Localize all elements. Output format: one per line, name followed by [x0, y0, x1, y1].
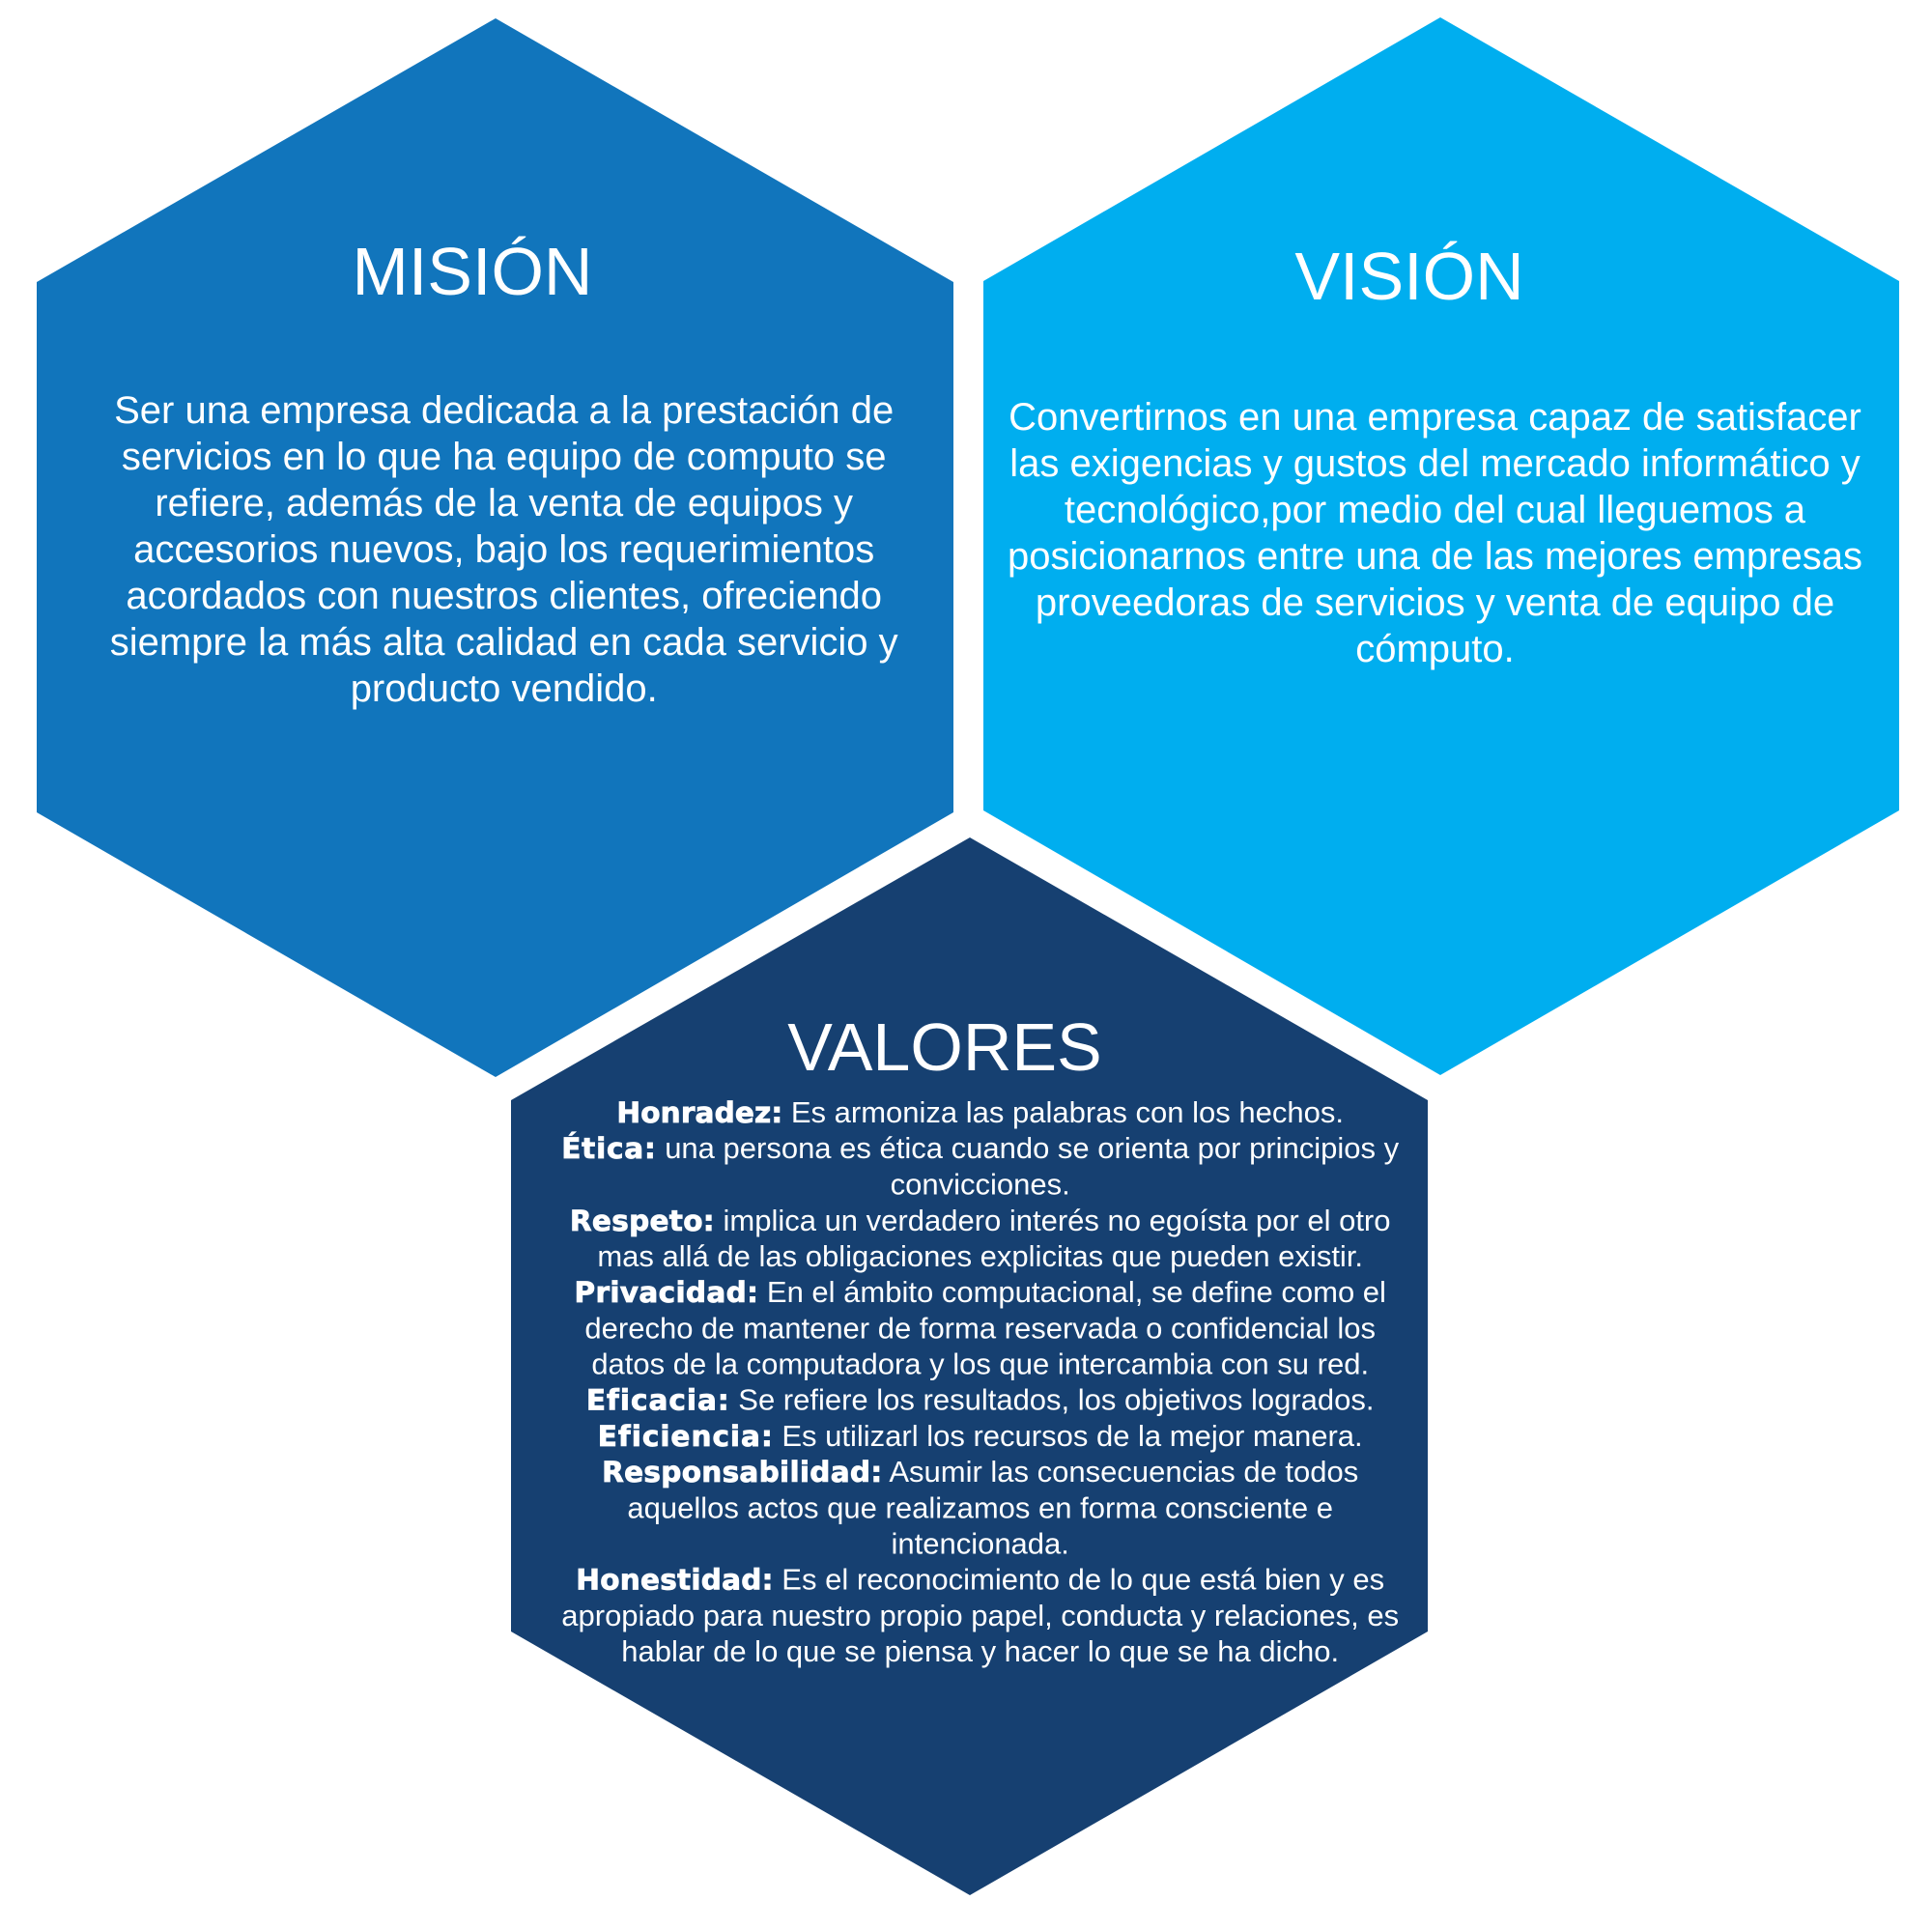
text block: valores list: Honradez: Es armoniza las palabras con los hechos.: [616, 1095, 1344, 1129]
text block: valores list: aquellos actos que realizamos en forma consciente e: [627, 1491, 1333, 1524]
heading: vision: VISIÓN: [1294, 239, 1524, 314]
text block: valores list: Ética: una persona es ética cuando se orienta por principios y: [561, 1131, 1400, 1165]
text block: mision body: refiere, además de la venta de equipos y: [155, 482, 853, 525]
text block: valores list: Responsabilidad: Asumir las consecuencias de todos: [602, 1455, 1358, 1489]
text block: mision body: siempre la más alta calidad en cada servicio y: [110, 621, 898, 664]
text block: valores list: apropiado para nuestro propio papel, conducta y relaciones, es: [561, 1599, 1399, 1632]
panel: valores: [511, 837, 1428, 1895]
text block: mision body: acordados con nuestros clientes, ofreciendo: [126, 575, 882, 617]
hexagon: valores background: [511, 837, 1428, 1895]
text block: vision body: proveedoras de servicios y venta de equipo de: [1036, 582, 1834, 624]
text block: valores list: Eficacia: Se refiere los resultados, los objetivos logrados.: [586, 1383, 1375, 1416]
text block: vision body: Convertirnos en una empresa capaz de satisfacer: [1009, 396, 1861, 439]
text block: valores list: Eficiencia: Es utilizarl los recursos de la mejor manera.: [598, 1419, 1363, 1453]
text block: valores list: mas allá de las obligaciones explicitas que pueden existir.: [597, 1239, 1363, 1273]
text block: valores list: convicciones.: [891, 1167, 1070, 1202]
heading: mision: MISIÓN: [353, 234, 592, 309]
text block: mision body: [110, 389, 898, 710]
text block: mision body: accesorios nuevos, bajo los requerimientos: [133, 528, 874, 571]
panel: mision: [37, 18, 953, 1077]
text block: vision body: cómputo.: [1355, 628, 1515, 670]
hexagon: mision background: [37, 18, 953, 1077]
text block: vision body: [1008, 396, 1862, 670]
panel: vision: [983, 17, 1899, 1075]
text block: valores list: datos de la computadora y los que intercambia con su red.: [591, 1347, 1369, 1381]
text block: valores list: hablar de lo que se piensa y hacer lo que se ha dicho.: [621, 1634, 1339, 1668]
text block: valores list: [561, 1095, 1400, 1668]
heading: valores: VALORES: [787, 1009, 1102, 1085]
text block: valores list: Privacidad: En el ámbito computacional, se define como el: [574, 1275, 1386, 1309]
text block: mision body: Ser una empresa dedicada a la prestación de: [114, 389, 894, 432]
text block: valores list: intencionada.: [891, 1526, 1069, 1561]
text block: valores list: Honestidad: Es el reconocimiento de lo que está bien y es: [576, 1563, 1384, 1596]
text block: valores list: Respeto: implica un verdadero interés no egoísta por el otro: [570, 1204, 1391, 1237]
text block: vision body: las exigencias y gustos del mercado informático y: [1009, 442, 1861, 485]
text block: mision body: producto vendido.: [351, 667, 658, 710]
text block: vision body: tecnológico,por medio del cual lleguemos a: [1065, 489, 1806, 531]
text block: valores list: derecho de mantener de forma reservada o confidencial los: [584, 1312, 1376, 1345]
hexagon: vision background: [983, 17, 1899, 1075]
text block: mision body: servicios en lo que ha equipo de computo se: [122, 436, 887, 478]
text block: vision body: posicionarnos entre una de las mejores empresas: [1008, 535, 1862, 578]
